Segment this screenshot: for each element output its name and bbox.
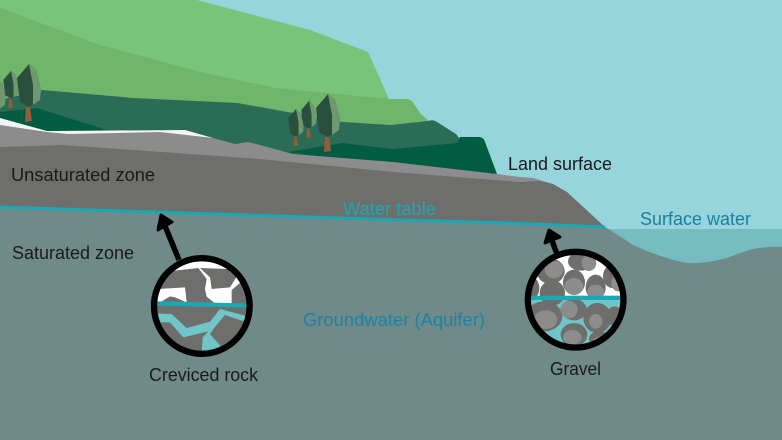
unsaturated zone: dark grey xyxy=(0,145,605,227)
trees left group xyxy=(0,64,41,122)
tree right large xyxy=(316,94,340,152)
trees right group xyxy=(288,94,340,152)
hill: lightest green slope xyxy=(0,0,389,130)
tree left large xyxy=(17,64,41,122)
water table line xyxy=(0,207,605,227)
white strip along ridge xyxy=(0,118,213,138)
label: surface water: Surface water xyxy=(640,209,751,229)
arrow: creviced rock to water table xyxy=(158,215,179,260)
tree right small xyxy=(288,109,304,146)
inset: gravel xyxy=(524,248,628,352)
tree right middle xyxy=(301,101,317,138)
label: land surface: Land surface xyxy=(508,154,612,174)
arrow: gravel to water table xyxy=(545,230,560,254)
label: water table: Water table xyxy=(343,199,436,219)
inset: creviced rock xyxy=(150,254,254,358)
hill: darkest green slope xyxy=(0,108,497,174)
hill: mid green slope xyxy=(0,8,430,135)
label: gravel: Gravel xyxy=(550,359,601,379)
ground: saturated zone xyxy=(0,207,782,440)
surface water xyxy=(600,229,782,269)
land surface: light grey xyxy=(0,125,560,195)
hill: dark green slope xyxy=(0,90,459,160)
label: saturated zone: Saturated zone xyxy=(12,243,134,263)
tree left middle xyxy=(3,71,19,108)
tree far left xyxy=(0,79,6,121)
label: unsaturated zone: Unsaturated zone xyxy=(11,165,155,185)
label: creviced rock: Creviced rock xyxy=(149,365,259,385)
label: groundwater aquifer: Groundwater (Aquifer) xyxy=(303,310,485,330)
